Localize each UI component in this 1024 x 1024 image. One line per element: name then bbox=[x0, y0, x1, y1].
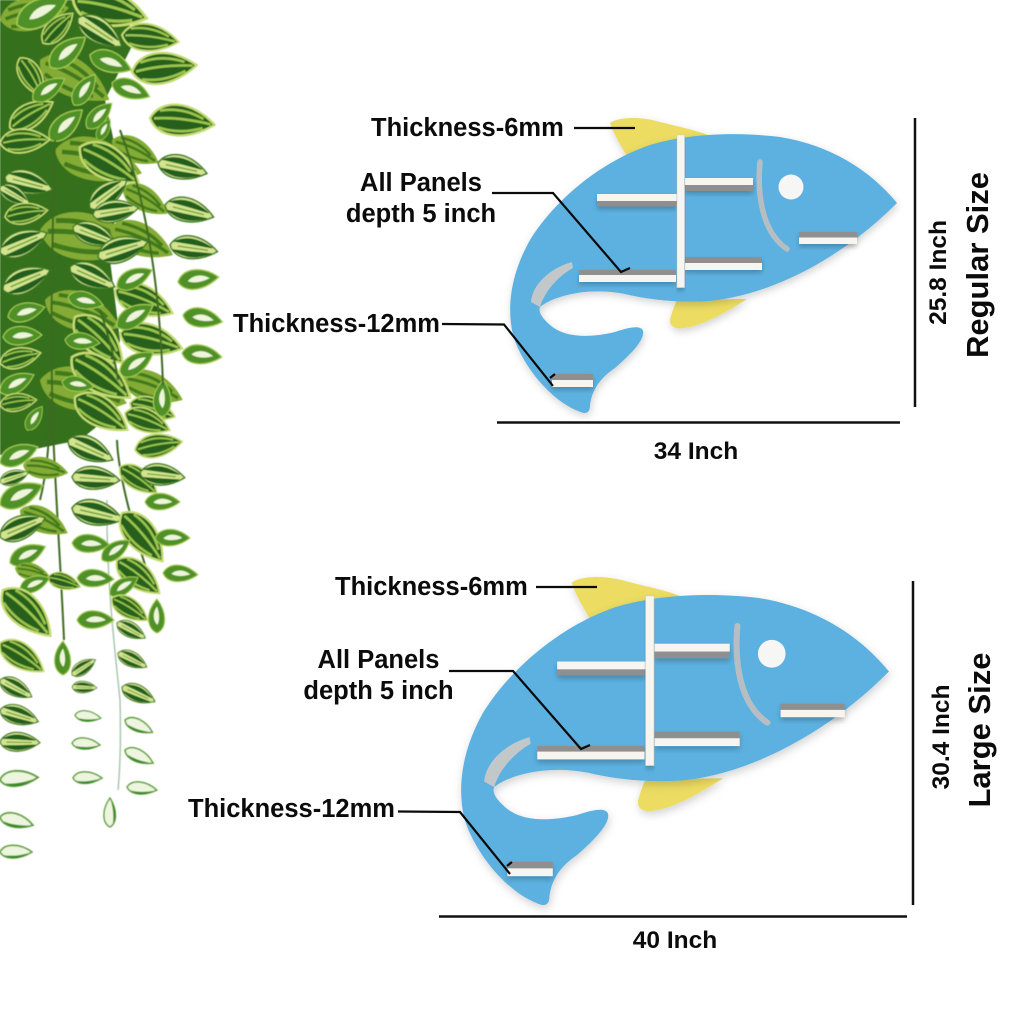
leader line to fin bbox=[536, 586, 597, 588]
width value: 34 Inch bbox=[654, 438, 738, 465]
gill slit bbox=[737, 626, 767, 723]
width value: 40 Inch bbox=[633, 927, 717, 954]
thickness-12mm label: Thickness-12mm bbox=[188, 795, 395, 823]
depth label: depth 5 inch bbox=[346, 200, 496, 228]
fish shelf: regular bbox=[510, 118, 897, 413]
lower foliage cluster bbox=[0, 429, 198, 858]
product diagram: regular size bbox=[233, 114, 995, 465]
backing leaves bbox=[0, 0, 148, 423]
eye bbox=[778, 174, 804, 200]
height value: 30.4 Inch bbox=[928, 685, 955, 789]
tail slit bbox=[484, 737, 531, 787]
all panels label: All Panels bbox=[360, 169, 482, 197]
width dimension line bbox=[497, 421, 900, 424]
leader line to shelf bbox=[449, 671, 590, 749]
leader line to fin bbox=[574, 127, 635, 129]
size title: Regular Size bbox=[960, 172, 995, 358]
eye bbox=[758, 640, 786, 668]
height dimension line bbox=[914, 118, 916, 407]
shelves bbox=[552, 135, 857, 387]
yellow top fin bbox=[572, 577, 680, 619]
width dimension line bbox=[439, 915, 907, 918]
product diagram: large size bbox=[188, 573, 997, 954]
blue fish body bbox=[510, 134, 897, 413]
thickness-12mm label: Thickness-12mm bbox=[233, 310, 440, 338]
hanging plant illustration bbox=[0, 0, 224, 858]
blue fish body bbox=[461, 595, 889, 905]
leader line to tail shelf bbox=[398, 812, 512, 874]
thickness-6mm label: Thickness-6mm bbox=[335, 573, 528, 601]
yellow bottom fin bbox=[638, 778, 723, 811]
thickness-6mm label: Thickness-6mm bbox=[371, 114, 564, 142]
yellow bottom fin bbox=[670, 299, 747, 328]
leader line to tail shelf bbox=[442, 324, 555, 386]
leader line to shelf bbox=[492, 193, 630, 272]
tail slit bbox=[531, 262, 573, 307]
height value: 25.8 Inch bbox=[925, 220, 952, 325]
stems bbox=[40, 130, 163, 640]
gill slit bbox=[759, 162, 787, 249]
shelves bbox=[507, 596, 845, 876]
fish shelf: large bbox=[461, 577, 889, 905]
upper foliage cluster bbox=[0, 0, 224, 442]
size title: Large Size bbox=[962, 652, 997, 808]
yellow top fin bbox=[610, 118, 708, 156]
all panels label: All Panels bbox=[318, 646, 439, 674]
foliage mass behind the leaves bbox=[0, 0, 135, 455]
depth label: depth 5 inch bbox=[303, 677, 454, 705]
height dimension line bbox=[912, 581, 914, 905]
